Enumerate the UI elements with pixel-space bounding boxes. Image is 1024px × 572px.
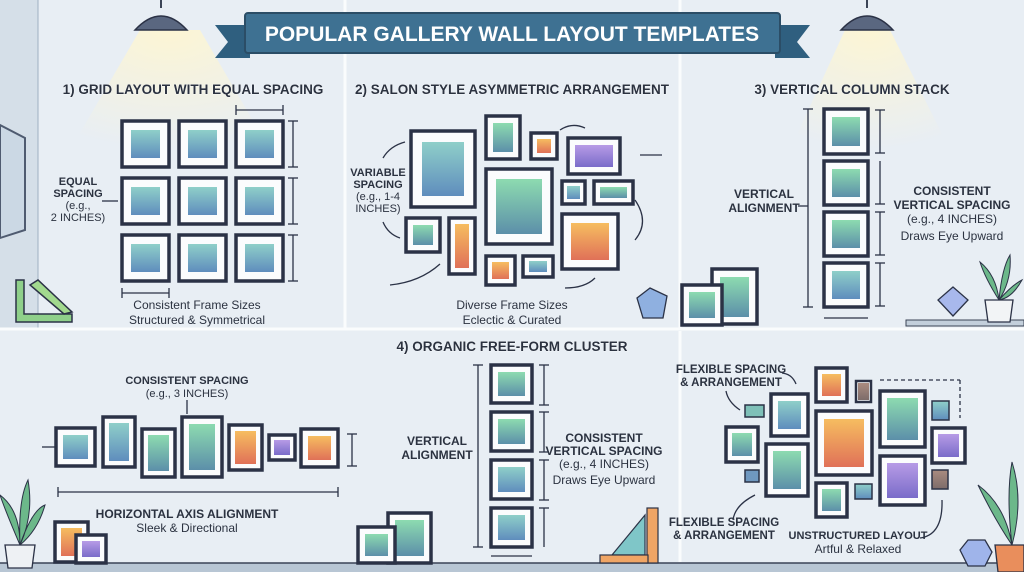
caption 1: Consistent Frame Sizes bbox=[133, 298, 261, 312]
icon: ruler and triangle bbox=[600, 508, 658, 563]
equal spacing label bbox=[51, 176, 105, 224]
vertical alignment label 4 bbox=[401, 434, 473, 462]
title banner bbox=[215, 13, 810, 58]
vertical spacing label 4: Draws Eye Upward bbox=[553, 473, 655, 487]
vertical alignment label 4: VERTICAL bbox=[407, 434, 467, 448]
vertical alignment label: VERTICAL bbox=[734, 187, 794, 201]
caption 2: Eclectic & Curated bbox=[463, 313, 561, 327]
heading 1: 1) GRID LAYOUT WITH EQUAL SPACING bbox=[63, 82, 323, 97]
flexible spacing top label: & ARRANGEMENT bbox=[680, 377, 782, 389]
vertical column frames bbox=[491, 365, 532, 547]
icon: lamp left bbox=[135, 0, 187, 30]
icon: plant and gem bbox=[906, 255, 1024, 326]
heading 4: 4) ORGANIC FREE-FORM CLUSTER bbox=[396, 339, 628, 354]
title banner: POPULAR GALLERY WALL LAYOUT TEMPLATES bbox=[265, 23, 759, 46]
icon: lamp right bbox=[841, 0, 893, 30]
flexible spacing top label: FLEXIBLE SPACING bbox=[676, 364, 786, 376]
equal spacing label: EQUAL bbox=[59, 176, 98, 188]
vertical spacing label 4: CONSISTENT bbox=[565, 431, 643, 445]
decor frames bottom bbox=[358, 513, 431, 563]
caption 2: Diverse Frame Sizes bbox=[456, 298, 568, 312]
caption 2 bbox=[456, 298, 568, 327]
row arrows bbox=[42, 400, 357, 497]
consistent spacing label bbox=[125, 375, 249, 400]
variable spacing label: SPACING bbox=[353, 179, 403, 191]
curved arrows bbox=[383, 125, 662, 288]
unstructured caption: UNSTRUCTURED LAYOUT bbox=[789, 530, 928, 542]
variable spacing label bbox=[350, 167, 406, 215]
cluster arrows bbox=[726, 373, 960, 538]
dimension arrows bbox=[798, 109, 885, 318]
flexible spacing bottom label: FLEXIBLE SPACING bbox=[669, 517, 779, 529]
panel: salon style bbox=[350, 82, 670, 327]
floor bbox=[0, 563, 1024, 572]
caption horizontal: HORIZONTAL AXIS ALIGNMENT bbox=[96, 507, 279, 521]
equal spacing label: 2 INCHES) bbox=[51, 212, 105, 224]
caption horizontal bbox=[96, 507, 279, 535]
horizontal row frames bbox=[56, 417, 338, 477]
grid frames bbox=[122, 121, 283, 281]
spacing label: (e.g., 4 INCHES) bbox=[907, 212, 997, 226]
vertical alignment label bbox=[728, 187, 800, 215]
icon: gem and plant right bbox=[960, 462, 1024, 572]
cluster frames bbox=[726, 368, 965, 517]
consistent spacing label: (e.g., 3 INCHES) bbox=[146, 388, 228, 400]
vertical alignment label 4: ALIGNMENT bbox=[401, 448, 473, 462]
variable spacing label: (e.g., 1-4 bbox=[356, 191, 400, 203]
salon frames bbox=[406, 116, 633, 285]
flexible spacing bottom label bbox=[669, 517, 779, 542]
vertical spacing label 4: (e.g., 4 INCHES) bbox=[559, 457, 649, 471]
heading 3: 3) VERTICAL COLUMN STACK bbox=[754, 82, 950, 97]
column frames bbox=[824, 109, 868, 307]
spacing label: Draws Eye Upward bbox=[901, 229, 1003, 243]
panel: vertical column bbox=[682, 82, 1024, 326]
caption horizontal: Sleek & Directional bbox=[136, 521, 238, 535]
equal spacing label: (e.g., bbox=[65, 200, 91, 212]
panel: grid layout bbox=[16, 82, 323, 327]
icon: ruler bbox=[16, 280, 72, 322]
panel: unstructured cluster bbox=[669, 364, 1024, 572]
vertical arrows bbox=[473, 365, 549, 556]
panel: organic free-form cluster bbox=[0, 339, 662, 568]
left wall picture bbox=[0, 125, 25, 238]
icon: plant left bbox=[0, 480, 45, 568]
heading 2: 2) SALON STYLE ASYMMETRIC ARRANGEMENT bbox=[355, 82, 670, 97]
icon: gem bbox=[637, 288, 667, 318]
vertical alignment label: ALIGNMENT bbox=[728, 201, 800, 215]
variable spacing label: VARIABLE bbox=[350, 167, 406, 179]
consistent spacing label: CONSISTENT SPACING bbox=[125, 375, 249, 387]
decor frames bbox=[682, 269, 757, 325]
spacing label: VERTICAL SPACING bbox=[894, 198, 1010, 212]
spacing label bbox=[894, 184, 1010, 243]
caption 1: Structured & Symmetrical bbox=[129, 313, 265, 327]
equal spacing label: SPACING bbox=[53, 188, 103, 200]
unstructured caption bbox=[789, 530, 928, 556]
flexible spacing bottom label: & ARRANGEMENT bbox=[673, 530, 775, 542]
spacing label: CONSISTENT bbox=[913, 184, 991, 198]
light cones bbox=[70, 30, 270, 150]
variable spacing label: INCHES) bbox=[355, 203, 401, 215]
unstructured caption: Artful & Relaxed bbox=[815, 542, 901, 556]
dimension arrows bbox=[102, 105, 298, 298]
vertical spacing label 4: VERTICAL SPACING bbox=[546, 444, 662, 458]
vertical spacing label 4 bbox=[546, 431, 662, 487]
caption 1 bbox=[129, 298, 265, 327]
flexible spacing top label bbox=[676, 364, 786, 389]
